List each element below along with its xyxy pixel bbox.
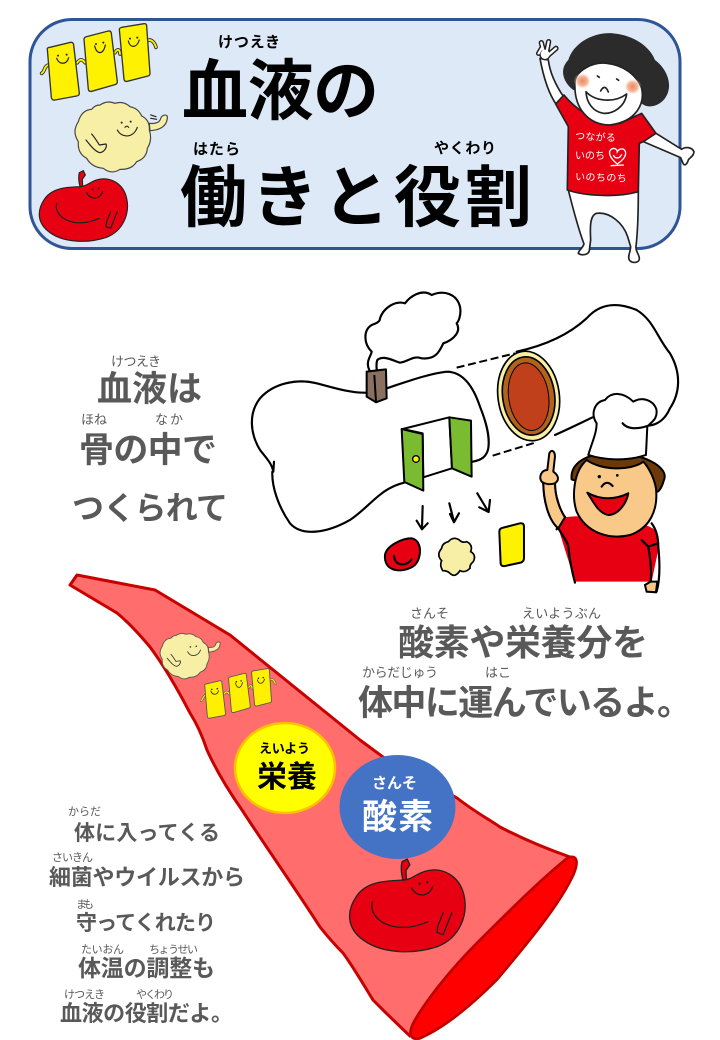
text: 体に入ってくる [68, 805, 220, 845]
chef: white hat [588, 394, 657, 459]
small yellow cell [499, 523, 524, 566]
shirt text: いのち [575, 150, 605, 162]
bone cross section [492, 347, 565, 445]
text: 体温の調整も: たいおん [81, 943, 124, 956]
small cream cell [439, 538, 475, 575]
heading: 血液の with ruby: 血液の [182, 54, 379, 128]
callout: 栄養: えいよう [259, 741, 310, 756]
red t-shirt [556, 95, 656, 195]
text: 血液は骨の中で: ほね [81, 412, 107, 427]
hair [563, 33, 669, 106]
heart logo [610, 148, 626, 166]
text: 体中に運んでいるよ。 [358, 665, 692, 723]
raised arm [540, 58, 564, 105]
bone outline left [252, 381, 404, 532]
smoke cloud [365, 293, 460, 370]
character: girl in red t-shirt [539, 33, 694, 262]
heading: 働きと役割 with ruby: 働きと役割 [180, 161, 532, 236]
blood vessel [70, 575, 570, 1036]
text: 血液の役割だよ。 [60, 988, 233, 1026]
dashed guide lines [457, 353, 535, 456]
vessel opening [411, 857, 577, 1039]
lowered arm and fist [643, 133, 694, 165]
heading: 働きと役割 with ruby: やくわり [434, 140, 496, 157]
text: 細菌やウイルスから: 細菌やウイルスから [49, 865, 245, 890]
text: 酸素や栄養分を: さんそ [410, 606, 449, 621]
icon: cream white blood cell [75, 102, 167, 172]
text: 体中に運んでいるよ。: 体中に運んでいるよ。 [358, 684, 692, 723]
text: 細菌やウイルスから [49, 851, 245, 890]
heading: 血液の with ruby: けつえき [218, 34, 280, 51]
text: 血液は骨の中で: けつえき [111, 354, 161, 369]
callout: 栄養 [235, 723, 335, 813]
text: 血液は骨の中で: つくられて [72, 490, 228, 526]
text: 体温の調整も: ちょうせい [149, 943, 198, 956]
vessel: white blood cell [160, 633, 220, 679]
text: 守ってくれたり: まも [76, 898, 94, 911]
vessel: platelets trio [201, 669, 275, 718]
text: 酸素や栄養分を: えいようぶん [522, 606, 601, 621]
text: 体中に運んでいるよ。: はこ [485, 665, 511, 680]
heading: 働きと役割 with ruby: はたら [193, 141, 240, 158]
chef: hair [572, 453, 665, 492]
chef: face [574, 460, 656, 537]
icon: yellow platelets trio [42, 24, 156, 100]
text: 守ってくれたり [76, 898, 216, 935]
face [575, 63, 642, 125]
smile [586, 92, 627, 113]
arrows [417, 493, 490, 529]
bone cut section outline [517, 305, 678, 435]
chef: arm skin [543, 482, 565, 528]
text: 血液は骨の中で: なか [155, 412, 183, 427]
chimney [367, 369, 387, 402]
raised hand [539, 42, 556, 60]
text: 血液の役割だよ。: 血液の役割だよ。 [60, 1001, 233, 1026]
green door left [402, 429, 423, 491]
text: 血液は骨の中で: 血液は [97, 370, 202, 409]
title banner panel [30, 20, 680, 248]
green door right [449, 417, 472, 477]
chef: lower hand [645, 582, 657, 592]
vessel: red blood cell [350, 859, 465, 952]
door knob [413, 456, 419, 462]
door opening [403, 417, 452, 477]
text: 体中に運んでいるよ。: からだじゅう [362, 665, 438, 680]
callout: 酸素 [340, 755, 456, 859]
text: 体に入ってくる: 体に入ってくる [74, 822, 220, 845]
icon: red blood cell [39, 171, 127, 241]
shirt text: いのちのち [575, 171, 627, 185]
shirt text: つながる [575, 129, 616, 144]
shirt text [575, 129, 627, 185]
cheeks [574, 72, 592, 90]
callout: 栄養: 栄養 [257, 761, 317, 794]
text: 血液は骨の中で: 骨の中で [79, 431, 217, 470]
callout: 酸素: さんそ [372, 775, 417, 792]
text: 体温の調整も [78, 943, 215, 981]
callout: 酸素: 酸素 [362, 798, 433, 837]
text: 血液の役割だよ。: けつえき [64, 988, 105, 1001]
text: 血液は骨の中で [72, 354, 228, 526]
bone outline right [387, 372, 489, 462]
chef: mouth [587, 493, 628, 515]
text: 細菌やウイルスから: さいきん [52, 851, 93, 864]
text: 体温の調整も: 体温の調整も [78, 955, 215, 981]
small red cell [385, 538, 420, 570]
bone illustration [252, 293, 678, 592]
text: 体に入ってくる: からだ [68, 805, 101, 818]
chef: red shirt and arm [542, 482, 658, 582]
text: 酸素や栄養分を: 酸素や栄養分を [398, 622, 648, 663]
chef: pointing hand [540, 451, 558, 484]
text: 守ってくれたり: 守ってくれたり [76, 912, 216, 935]
legs [568, 190, 639, 262]
text: 血液の役割だよ。: やくわり [136, 988, 174, 1001]
